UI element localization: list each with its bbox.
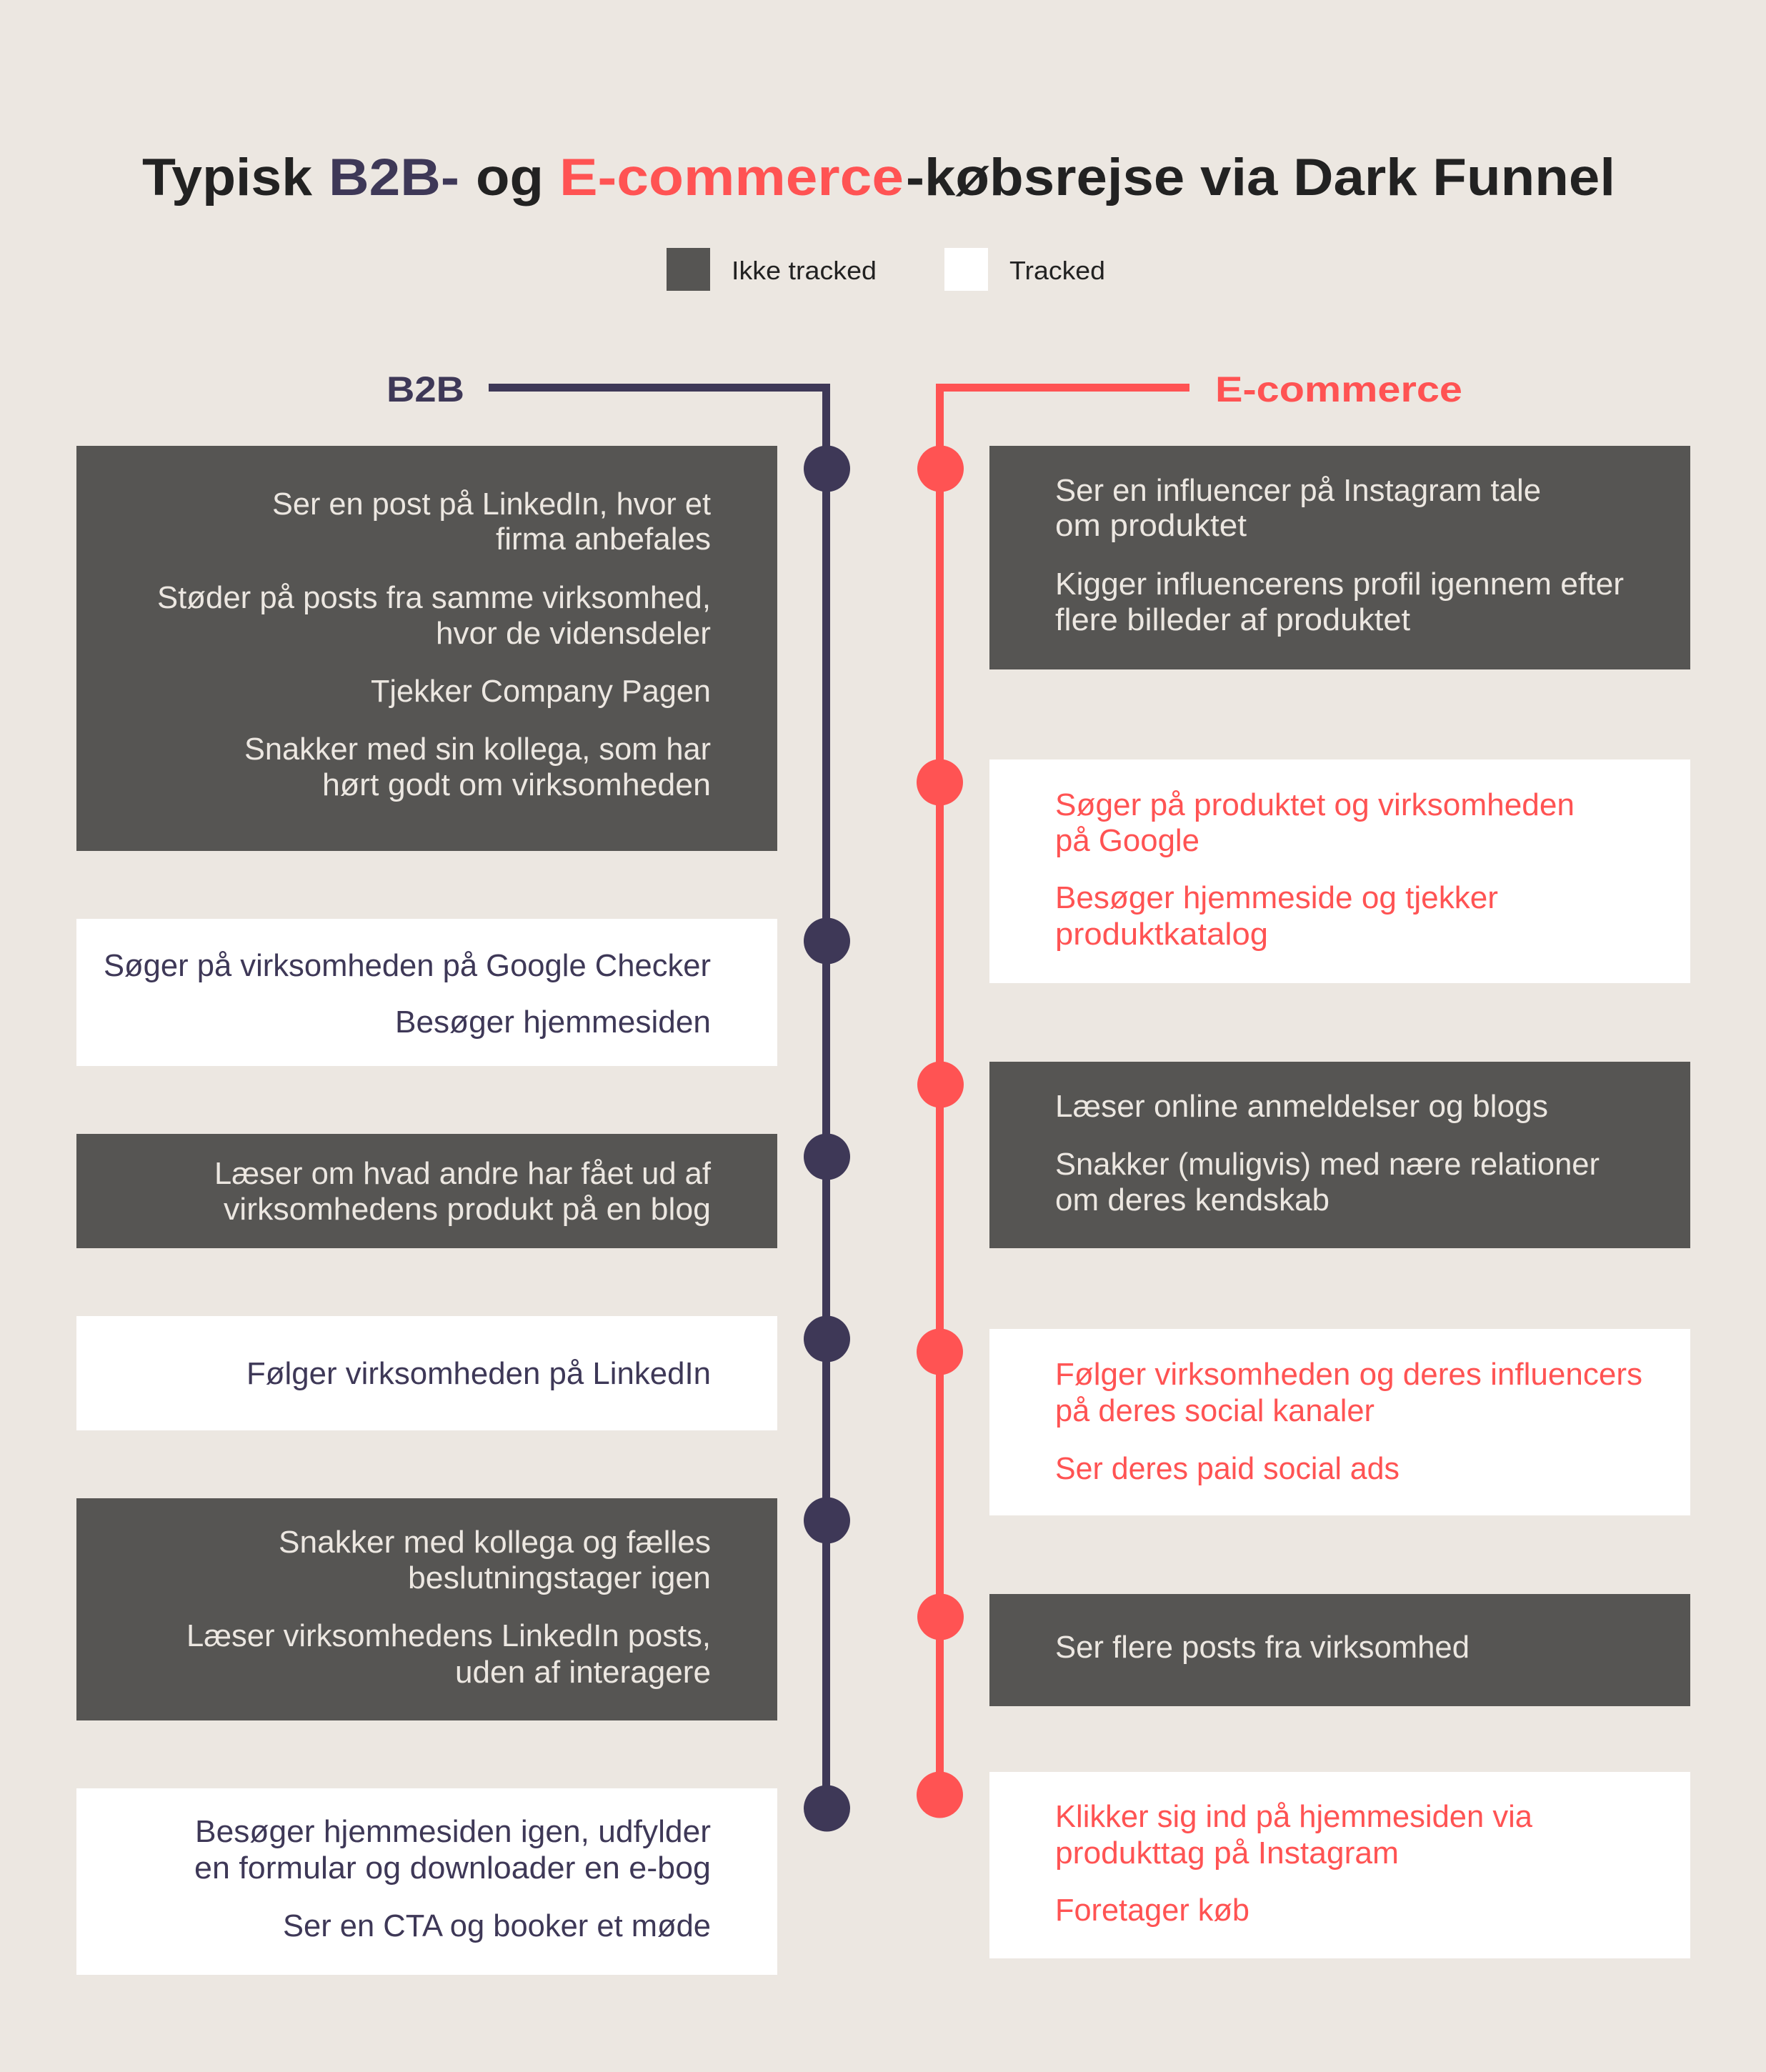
panel: B2B step 3, not tracked: virksomhedens produkt på en blog — [224, 1192, 711, 1227]
panel: E-commerce step 3, not tracked: Læser online anmeldelser og blogs — [1055, 1089, 1548, 1124]
heading: B2B: B2B — [386, 369, 464, 409]
title: og — [476, 149, 544, 206]
legend swatch: tracked — [944, 248, 988, 291]
panel: B2B step 1, not tracked: Ser en post på LinkedIn, hvor et — [272, 487, 711, 522]
panel: B2B step 5, not tracked: Læser virksomhedens LinkedIn posts, — [186, 1618, 711, 1653]
panel: B2B step 1, not tracked: firma anbefales — [496, 522, 711, 557]
panel: B2B step 3, not tracked — [76, 1134, 777, 1248]
panel: B2B step 6, tracked: en formular og downloader en e-bog — [194, 1851, 711, 1886]
panel: B2B step 3, not tracked: Læser om hvad andre har fået ud af — [214, 1156, 712, 1191]
panel: B2B step 5, not tracked: Snakker med kollega og fælles — [279, 1525, 711, 1560]
panel: E-commerce step 2, tracked: Besøger hjemmeside og tjekker — [1055, 880, 1498, 915]
panel: E-commerce step 4, tracked: Følger virksomheden og deres influencers — [1055, 1357, 1642, 1392]
timeline: B2B — [489, 384, 850, 1832]
panel: E-commerce step 6, tracked: produkttag på Instagram — [1055, 1836, 1399, 1871]
panel: E-commerce step 2, tracked: Søger på produktet og virksomheden — [1055, 787, 1575, 822]
panel: B2B step 4, tracked: Følger virksomheden på LinkedIn — [246, 1356, 711, 1391]
panel: E-commerce step 2, tracked: på Google — [1055, 823, 1199, 858]
panel: E-commerce step 2, tracked — [989, 759, 1690, 983]
panel: B2B step 1, not tracked: Snakker med sin kollega, som har — [244, 732, 711, 767]
panel: E-commerce step 6, tracked: Klikker sig ind på hjemmesiden via — [1055, 1799, 1533, 1834]
panel: E-commerce step 2, tracked: produktkatalog — [1055, 917, 1268, 952]
heading: E-commerce: E-commerce — [1215, 369, 1462, 409]
panel: B2B step 4, tracked — [76, 1316, 777, 1430]
panel: B2B step 1, not tracked: Tjekker Company Pagen — [371, 674, 711, 709]
panel: E-commerce step 1, not tracked: Ser en influencer på Instagram tale — [1055, 473, 1541, 508]
panel: E-commerce step 4, tracked: på deres social kanaler — [1055, 1393, 1375, 1428]
panel: B2B step 1, not tracked: Støder på posts fra samme virksomhed, — [157, 580, 711, 615]
panel: E-commerce step 1, not tracked: flere billeder af produktet — [1055, 602, 1410, 637]
panel: E-commerce step 3, not tracked — [989, 1062, 1690, 1248]
panel: B2B step 6, tracked: Ser en CTA og booker et møde — [283, 1908, 711, 1943]
panel: B2B step 1, not tracked — [76, 446, 777, 851]
legend swatch: not tracked — [667, 248, 710, 291]
panel: B2B step 5, not tracked — [76, 1498, 777, 1720]
panel: E-commerce step 5, not tracked — [989, 1594, 1690, 1706]
panel: B2B step 6, tracked — [76, 1788, 777, 1975]
panel: E-commerce step 5, not tracked: Ser flere posts fra virksomhed — [1055, 1630, 1470, 1665]
title: Typisk — [142, 149, 312, 206]
panel: B2B step 5, not tracked: beslutningstager igen — [408, 1560, 711, 1595]
panel: E-commerce step 6, tracked: Foretager køb — [1055, 1893, 1249, 1928]
panel: B2B step 2, tracked: Søger på virksomheden på Google Checker — [104, 948, 711, 983]
panel: B2B step 6, tracked: Besøger hjemmesiden igen, udfylder — [195, 1814, 711, 1849]
panel: B2B step 1, not tracked: hvor de vidensdeler — [436, 616, 711, 651]
panel: E-commerce step 1, not tracked — [989, 446, 1690, 669]
panel: E-commerce step 1, not tracked: Kigger influencerens profil igennem efter — [1055, 567, 1624, 602]
legend label: not tracked: Ikke tracked — [732, 256, 877, 285]
panel: B2B step 2, tracked — [76, 919, 777, 1066]
panel: B2B step 5, not tracked: uden af interagere — [455, 1655, 711, 1690]
panel: B2B step 2, tracked: Besøger hjemmesiden — [395, 1005, 711, 1040]
panel: E-commerce step 1, not tracked: om produktet — [1055, 508, 1247, 543]
title: E-commerce — [559, 149, 904, 206]
panel: E-commerce step 3, not tracked: Snakker (muligvis) med nære relationer — [1055, 1147, 1600, 1182]
title: -købsrejse via Dark Funnel — [906, 149, 1615, 206]
timeline: E-commerce — [917, 384, 1189, 1818]
panel: E-commerce step 6, tracked — [989, 1772, 1690, 1958]
panel: E-commerce step 4, tracked: Ser deres paid social ads — [1055, 1451, 1400, 1486]
legend label: tracked: Tracked — [1009, 256, 1105, 285]
legend — [667, 248, 1105, 291]
panel: E-commerce step 4, tracked — [989, 1329, 1690, 1515]
panel: B2B step 1, not tracked: hørt godt om virksomheden — [322, 767, 711, 802]
title: B2B- — [329, 149, 459, 206]
panel: E-commerce step 3, not tracked: om deres kendskab — [1055, 1182, 1330, 1217]
title — [142, 149, 1615, 206]
